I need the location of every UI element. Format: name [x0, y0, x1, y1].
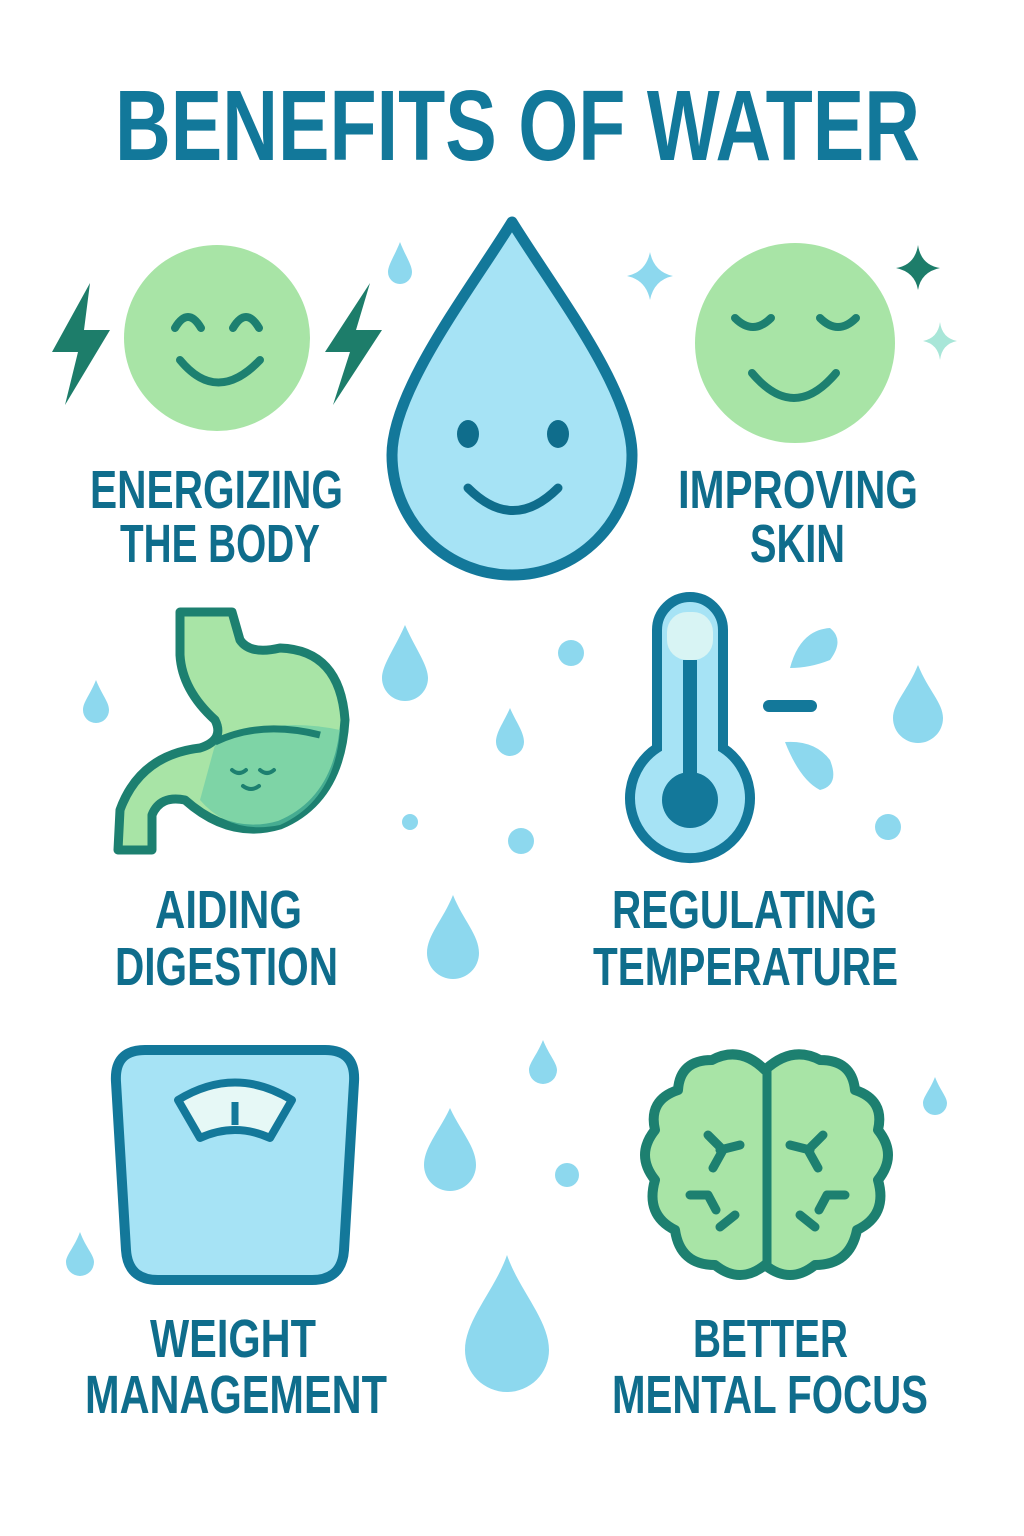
label: weight management: WEIGHT: [150, 1309, 316, 1369]
label: better mental focus: [612, 1309, 928, 1425]
icon: central water drop: [392, 222, 632, 575]
label: aiding digestion: [115, 880, 338, 997]
label: better mental focus: MENTAL FOCUS: [612, 1365, 928, 1425]
label: regulating temperature: TEMPERATURE: [593, 937, 898, 997]
label: aiding digestion: AIDING: [155, 880, 302, 940]
label: weight management: MANAGEMENT: [85, 1365, 387, 1425]
label: weight management: [85, 1309, 387, 1425]
label: energizing the body: THE BODY: [120, 514, 320, 574]
label: energizing the body: ENERGIZING: [90, 460, 343, 520]
label: improving skin: [678, 460, 918, 574]
label: regulating temperature: [593, 880, 898, 997]
icon: small drop: [388, 242, 412, 284]
icon: energizing face: [52, 245, 382, 431]
icon: brain: [645, 1054, 888, 1275]
label: regulating temperature: REGULATING: [612, 880, 877, 940]
label: improving skin: SKIN: [750, 514, 845, 574]
label: energizing the body: [90, 460, 343, 574]
icon: scale: [116, 1050, 354, 1280]
decorative drops: [66, 625, 947, 1392]
icon: stomach: [118, 612, 345, 850]
icon: thermometer: [630, 597, 838, 858]
icon: improving skin face: [627, 243, 957, 443]
label: aiding digestion: DIGESTION: [115, 937, 338, 997]
label: improving skin: IMPROVING: [678, 460, 918, 520]
label: better mental focus: BETTER: [693, 1309, 848, 1369]
